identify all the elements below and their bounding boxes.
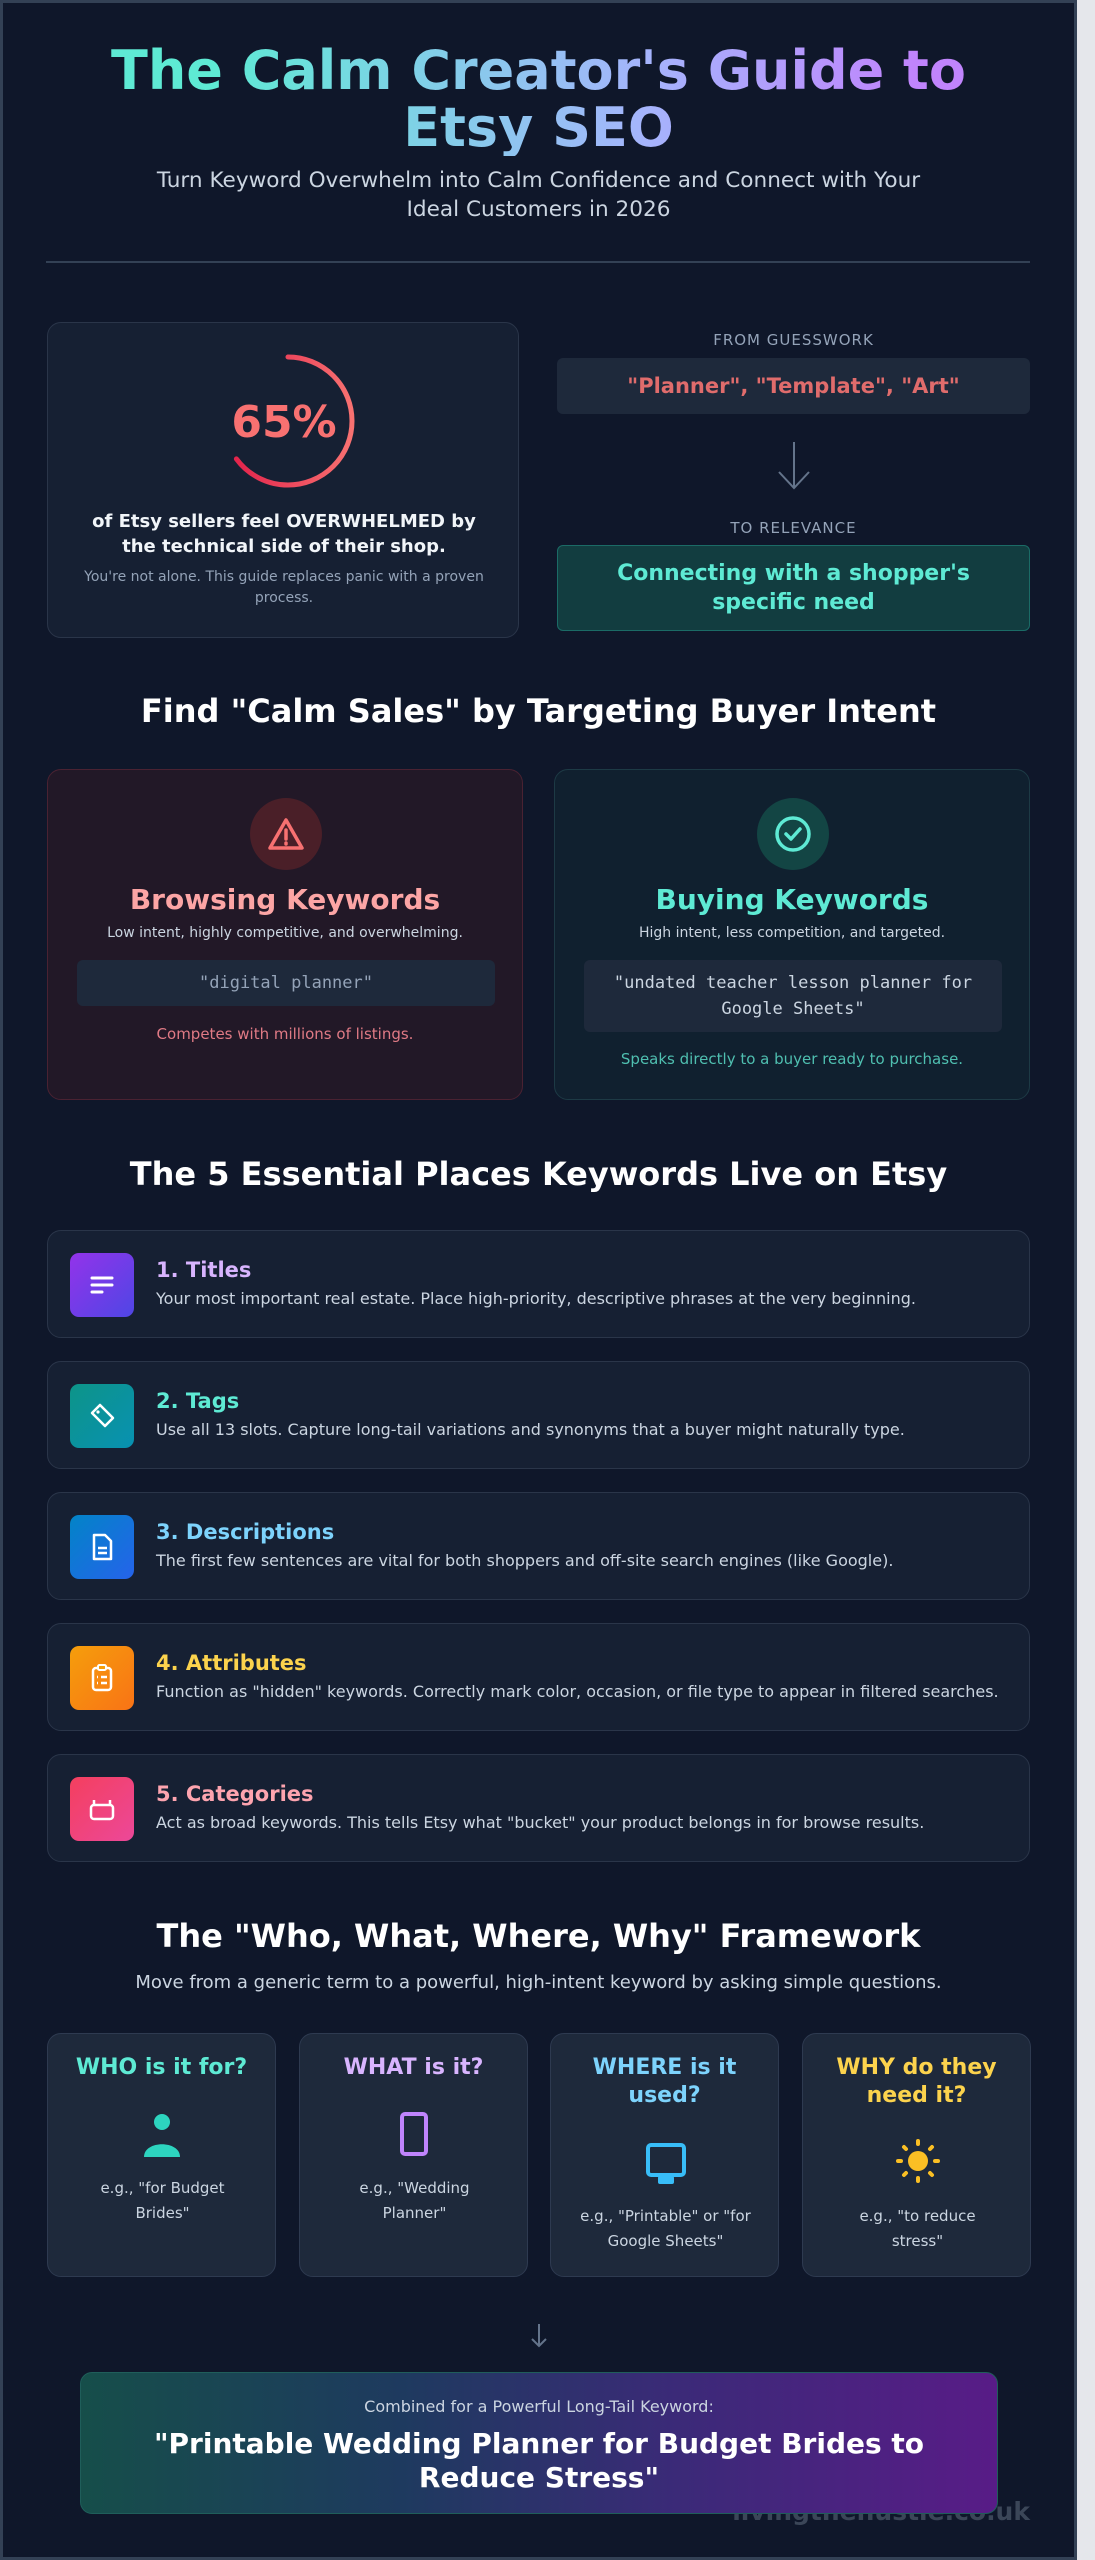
subtitle <box>156 168 920 222</box>
icon: document <box>70 1515 134 1579</box>
panel: browsing keywords: Browsing Keywords <box>130 883 440 916</box>
stat text: of Etsy sellers feel OVERWHELMED by <box>92 511 476 532</box>
item: categories: 5. Categories <box>156 1782 314 1806</box>
chart: 65% ring <box>231 354 354 488</box>
item: attributes: 4. Attributes <box>156 1651 307 1675</box>
stat text: the technical side of their shop. <box>122 536 446 557</box>
item: categories: Act as broad keywords. This tells Etsy what "bucket" your product belongs in for browse results. <box>156 1813 924 1832</box>
panel: stat card: process. <box>255 590 313 606</box>
item: descriptions: 3. Descriptions <box>156 1520 334 1544</box>
heading: buyer intent: Find "Calm Sales" by Targeting Buyer Intent <box>141 692 936 730</box>
code: long tail: Google Sheets" <box>721 999 865 1019</box>
chart: 65% ring: 65% <box>231 397 337 448</box>
code: digital planner <box>77 960 495 1006</box>
code: long tail <box>584 960 1002 1032</box>
panel: browsing keywords <box>47 769 523 1100</box>
title: The Calm Creator's Guide to <box>111 39 966 102</box>
label: from guesswork: FROM GUESSWORK <box>713 331 874 349</box>
item: categories <box>47 1754 1030 1862</box>
panel: browsing keywords: Competes with millions of listings. <box>157 1025 413 1043</box>
subtitle: Turn Keyword Overwhelm into Calm Confidence and Connect with Your <box>157 168 920 193</box>
item: descriptions: The first few sentences are vital for both shoppers and off-site search engines (like Google). <box>156 1551 893 1570</box>
icon: titles <box>70 1253 134 1317</box>
icon: tag <box>70 1384 134 1448</box>
item: attributes <box>47 1623 1030 1731</box>
relevance box: Connecting with a shopper's <box>617 561 970 586</box>
icon: sun <box>896 2139 940 2183</box>
card: why: need it? <box>867 2083 966 2108</box>
card: what <box>299 2033 528 2277</box>
title <box>0 42 1077 156</box>
title: Etsy SEO <box>403 96 674 159</box>
item: tags: 2. Tags <box>156 1389 239 1413</box>
item: tags <box>47 1361 1030 1469</box>
icon: phone <box>400 2112 428 2156</box>
card: why: WHY do they <box>836 2055 997 2080</box>
arrow <box>531 2324 547 2348</box>
card: why <box>802 2033 1031 2277</box>
stat text <box>92 511 476 557</box>
panel: buying keywords: Buying Keywords <box>656 883 928 916</box>
code: digital planner: "digital planner" <box>199 973 373 993</box>
item: titles: Your most important real estate. Place high-priority, descriptive phrases at the very beginning. <box>156 1289 916 1308</box>
heading: framework: The "Who, What, Where, Why" Framework <box>157 1917 920 1955</box>
card: who: WHO is it for? <box>76 2055 247 2080</box>
item: titles <box>47 1230 1030 1338</box>
card: who: e.g., "for Budget Brides" <box>100 2179 225 2222</box>
icon: monitor <box>646 2143 686 2184</box>
final keyword box: Combined for a Powerful Long-Tail Keyword: <box>364 2397 714 2416</box>
final keyword box: "Printable Wedding Planner for Budget Brides to <box>154 2427 924 2460</box>
arrow <box>778 442 810 490</box>
relevance box: specific need <box>712 590 875 615</box>
subtitle: Ideal Customers in 2026 <box>407 197 670 222</box>
item: tags: Use all 13 slots. Capture long-tail variations and synonyms that a buyer might naturally type. <box>156 1420 905 1439</box>
card: why: e.g., "to reduce stress" <box>859 2207 976 2250</box>
panel: buying keywords <box>554 769 1030 1100</box>
card: where: e.g., "Printable" or "for Google Sheets" <box>580 2207 751 2250</box>
item: titles: 1. Titles <box>156 1258 251 1282</box>
item: attributes: Function as "hidden" keywords. Correctly mark color, occasion, or file type to appear in filtered searches. <box>156 1682 999 1701</box>
framework subtitle: Move from a generic term to a powerful, high-intent keyword by asking simple questions. <box>135 1972 942 1993</box>
panel: buying keywords: High intent, less competition, and targeted. <box>639 925 945 941</box>
card: who <box>47 2033 276 2277</box>
guesswork box <box>557 358 1030 414</box>
panel: stat card <box>47 322 519 638</box>
relevance box <box>557 545 1030 631</box>
icon: warning <box>250 798 322 870</box>
label: to relevance: TO RELEVANCE <box>730 519 857 537</box>
panel: stat card: You're not alone. This guide replaces panic with a proven <box>84 569 484 585</box>
final keyword box: Reduce Stress" <box>419 2461 659 2494</box>
icon: person <box>144 2114 180 2157</box>
panel: buying keywords: Speaks directly to a buyer ready to purchase. <box>621 1050 963 1068</box>
card: where: used? <box>628 2083 701 2108</box>
item: descriptions <box>47 1492 1030 1600</box>
card: what: e.g., "Wedding Planner" <box>359 2179 470 2222</box>
code: long tail: "undated teacher lesson planner for <box>614 973 972 993</box>
card: what: WHAT is it? <box>344 2055 483 2080</box>
guesswork box: "Planner", "Template", "Art" <box>627 374 960 398</box>
card: where: WHERE is it <box>593 2055 736 2080</box>
final keyword box <box>80 2372 998 2514</box>
panel: browsing keywords: Low intent, highly competitive, and overwhelming. <box>107 925 463 941</box>
card: where <box>550 2033 779 2277</box>
heading: 5 places: The 5 Essential Places Keywords Live on Etsy <box>130 1155 947 1193</box>
icon: clipboard <box>70 1646 134 1710</box>
icon: check <box>757 798 829 870</box>
watermark: livingthehustle.co.uk <box>732 2497 1030 2526</box>
icon: box <box>70 1777 134 1841</box>
